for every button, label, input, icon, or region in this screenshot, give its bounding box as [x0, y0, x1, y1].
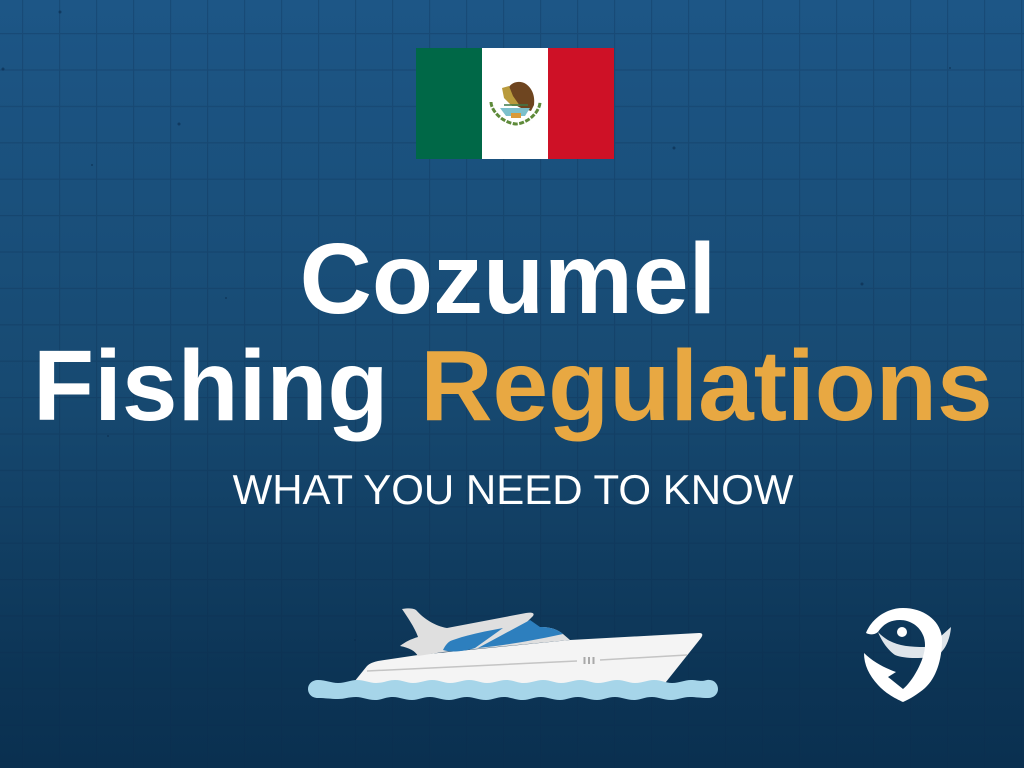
title — [33, 223, 993, 442]
icon: Mexican flag — [416, 48, 614, 159]
title: Cozumel — [300, 223, 716, 335]
title: Fishing Regulations — [33, 330, 993, 442]
icon: fish logo — [864, 608, 951, 702]
subtitle: WHAT YOU NEED TO KNOW — [233, 466, 794, 513]
icon: boat on water — [308, 608, 718, 700]
